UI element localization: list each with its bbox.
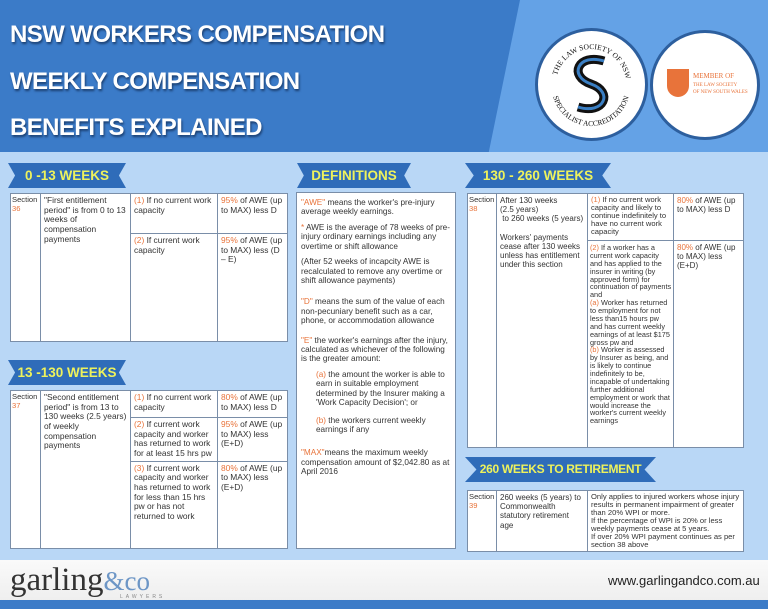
table: section 39: If the percentage of WPI is 20% or less weekly payments cease at 5 years. bbox=[591, 516, 722, 533]
table: section 36: 95% of AWE (up to MAX) less D bbox=[221, 195, 282, 215]
title: WEEKLY COMPENSATION bbox=[10, 68, 300, 95]
table: section 36: "First entitlement period" is from 0 to 13 weeks of compensation payments bbox=[44, 195, 126, 244]
table: section 37: 80% of AWE (up to MAX) less D bbox=[221, 392, 282, 412]
table: section 36: 95% of AWE (up to MAX) less (D – E) bbox=[221, 235, 282, 264]
title bbox=[10, 21, 386, 141]
table: section 36: Section bbox=[12, 195, 37, 204]
banner: definitions bbox=[297, 163, 411, 188]
panel: definitions: "E" the worker's earnings after the injury, calculated as whichever of the following is the greater amount: bbox=[301, 336, 448, 363]
table: section 37: 37 bbox=[12, 401, 20, 410]
table: section 39: Section bbox=[469, 492, 494, 501]
logo: member of law society bbox=[650, 30, 760, 140]
table: section 37: (1) If no current work capacity bbox=[134, 392, 211, 412]
panel: definitions: "AWE" means the worker's pre-injury average weekly earnings. bbox=[301, 198, 435, 216]
table: section 37: 95% of AWE (up to MAX) less (E+D) bbox=[221, 419, 282, 448]
table: section 39: 39 bbox=[469, 501, 477, 510]
table: section 38: After 130 weeks bbox=[500, 196, 557, 205]
table: section 39: 260 weeks (5 years) to Commonwealth statutory retirement age bbox=[500, 493, 581, 530]
title: NSW WORKERS COMPENSATION bbox=[10, 21, 384, 48]
website url: www.garlingandco.com.au bbox=[608, 573, 760, 588]
panel: definitions: * AWE is the average of 78 weeks of pre-injury ordinary earnings including any overtime or shift allowance bbox=[301, 223, 450, 251]
table: section 39: If over 20% WPI payment continues as per section 38 above bbox=[591, 532, 735, 549]
banner: 260 weeks to retirement bbox=[465, 457, 656, 482]
table: section 39: Only applies to injured workers whose injury results in permanent impairment of greater than 20% WPI or more. bbox=[591, 492, 739, 517]
banner: definitions: DEFINITIONS bbox=[311, 168, 397, 183]
panel: definitions bbox=[296, 192, 456, 549]
table: section 36: (1) If no current work capacity bbox=[134, 195, 211, 215]
table: section 37: (2) If current work capacity and worker has returned to work for at least 15 hrs pw bbox=[134, 419, 212, 458]
logo: garling & co: LAWYERS bbox=[120, 594, 165, 600]
banner: 13-130 weeks bbox=[8, 360, 126, 385]
title: BENEFITS EXPLAINED bbox=[10, 114, 262, 141]
banner: 0-13 weeks: 0 -13 WEEKS bbox=[25, 168, 109, 183]
logo: law society specialist accreditation: THE LAW SOCIETY OF NSW bbox=[552, 44, 631, 78]
panel: definitions: (b) the workers current weekly earnings if any bbox=[316, 416, 426, 434]
footer bbox=[0, 560, 768, 609]
table: section 38: Workers' payments cease after 130 weeks unless has entitlement under this section bbox=[500, 233, 580, 269]
logo: member of law society: OF NEW SOUTH WALES bbox=[693, 90, 748, 95]
logo: law society specialist accreditation: SPECIALIST ACCREDITATION bbox=[553, 96, 629, 126]
table: section 39 bbox=[467, 490, 744, 552]
panel: definitions: (After 52 weeks of incapcity AWE is recalculated to remove any overtime or shift allowance payments) bbox=[301, 257, 443, 285]
table: section 38: (b) Worker is assessed by Insurer as being, and is likely to continue indefinitely to be, incapable of undertaking further additional employment or work that would increase the worker's current weekly earnings bbox=[590, 345, 670, 425]
logo: garling & co: garling&co bbox=[10, 562, 150, 598]
table: section 38 bbox=[467, 193, 744, 448]
table: section 36: 36 bbox=[12, 204, 20, 213]
logo: member of law society: MEMBER OF bbox=[693, 72, 734, 80]
header dark panel bbox=[0, 0, 520, 152]
logo: member of law society: THE LAW SOCIETY bbox=[693, 83, 737, 88]
header background bbox=[0, 0, 768, 152]
table: section 38: 38 bbox=[469, 204, 477, 213]
table: section 37: 80% of AWE (up to MAX) less (E+D) bbox=[221, 463, 282, 492]
panel: definitions: (a) the amount the worker is able to earn in suitable employment determined by the Insurer making a 'Work Capacity Decision'; or bbox=[316, 370, 445, 407]
table: section 38: (1) If no current work capacity and likely to continue indefinitely to have no current work capacity bbox=[591, 195, 666, 236]
table: section 36: (2) If current work capacity bbox=[134, 235, 200, 255]
panel: definitions: "D" means the sum of the value of each non-pecuniary benefit such as a car, phone, or accommodation allowance bbox=[301, 297, 445, 325]
table: section 38: 80% of AWE (up to MAX) less D bbox=[677, 196, 735, 214]
logo: law society specialist accreditation bbox=[535, 28, 648, 141]
banner: 130-260 weeks bbox=[465, 163, 611, 188]
table: section 38: (2) If a worker has a current work capacity and has applied to the insurer in writing (by approved form) for continuation of payments and bbox=[590, 243, 671, 299]
table: section 38: Section bbox=[469, 195, 494, 204]
table: section 37: (3) If current work capacity and worker has returned to work for less than 15 hrs pw or has not returned to work bbox=[134, 463, 210, 521]
table: section 37: "Second entitlement period" is from 13 to 130 weeks (2.5 years) of weekly compensation payments bbox=[44, 392, 126, 450]
banner: 260 weeks to retirement: 260 WEEKS TO RETIREMENT bbox=[480, 462, 641, 476]
table: section 36 bbox=[10, 193, 288, 342]
table: section 38: to 260 weeks (5 years) bbox=[502, 214, 583, 223]
table: section 38: (2.5 years) bbox=[500, 205, 538, 214]
table: section 38: (a) Worker has returned to employment for not less than15 hours pw and has current weekly earnings of at least $175 gross pw and bbox=[590, 298, 670, 346]
panel: definitions: "MAX"means the maximum weekly compensation amount of $2,042.80 as at April 2016 bbox=[301, 448, 449, 476]
banner: 130-260 weeks: 130 - 260 WEEKS bbox=[483, 168, 593, 183]
table: section 38: 80% of AWE (up to MAX) less (E+D) bbox=[677, 243, 735, 270]
banner: 0-13 weeks bbox=[8, 163, 126, 188]
table: section 37 bbox=[10, 390, 288, 549]
banner: 13-130 weeks: 13 -130 WEEKS bbox=[17, 365, 117, 380]
table: section 37: Section bbox=[12, 392, 37, 401]
